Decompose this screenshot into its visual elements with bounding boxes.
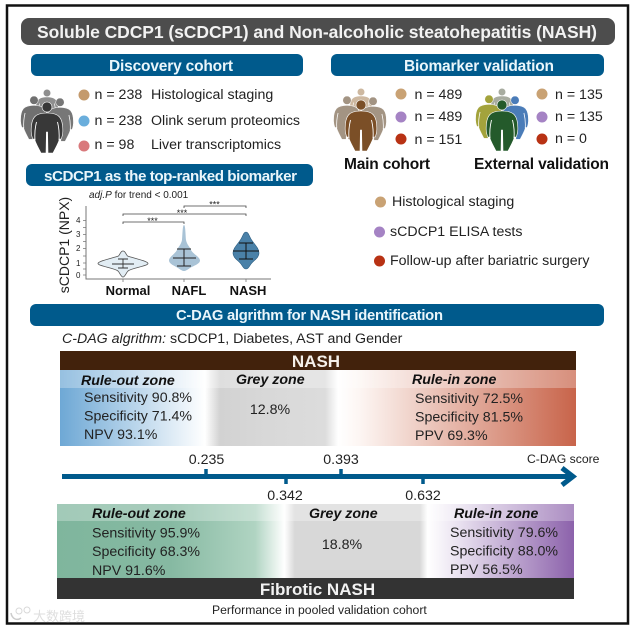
legend: discovery datasets: Liver transcriptomics [151, 137, 281, 153]
watermark [11, 607, 85, 624]
legend: validation datasets: Histological staging [392, 194, 514, 210]
y axis ticks: 2 [76, 244, 81, 253]
legend: validation datasets [374, 194, 590, 269]
heading: biomarker validation [331, 54, 604, 76]
zone: rule-out: NPV 91.6% [92, 563, 166, 579]
heading: fibrotic NASH [57, 578, 574, 599]
legend: external validation: n = 0 [555, 131, 587, 147]
zone: rule-in: PPV 69.3% [415, 428, 488, 444]
legend: discovery datasets: Histological staging [151, 87, 273, 103]
heading: discovery cohort: Discovery cohort [109, 58, 233, 75]
zone: rule-out: NPV 93.1% [84, 427, 158, 443]
cutoffs [189, 452, 441, 504]
zone: rule-in: Sensitivity 72.5% [415, 391, 523, 407]
heading: fibrotic NASH: Fibrotic NASH [260, 580, 375, 599]
heading: top-ranked biomarker [26, 164, 313, 186]
legend: discovery datasets: n = 98 [94, 137, 134, 153]
zone: rule-out [92, 506, 200, 579]
violin: Normal [98, 251, 148, 277]
zone: grey: Grey zone [236, 372, 305, 388]
zone: rule-out: Sensitivity 90.8% [84, 390, 192, 406]
cutoffs: 0.393 [323, 452, 359, 468]
legend: discovery datasets: n = 238 [94, 113, 142, 129]
icon: external validation group [476, 88, 528, 151]
zone: rule-in [412, 372, 523, 444]
heading: discovery cohort [31, 54, 303, 76]
legend: external validation [536, 87, 603, 147]
zone: rule-out: Rule-out zone [92, 506, 186, 522]
zone: rule-in: Sensitivity 79.6% [450, 525, 558, 541]
legend: external validation: n = 135 [555, 109, 603, 125]
legend: main cohort [396, 87, 462, 148]
heading: C-DAG algorithm: C-DAG algrithm for NASH identification [176, 308, 443, 324]
heading: NASH [60, 351, 576, 371]
text: algorithm components: C-DAG algrithm: sCDCP1, Diabetes, AST and Gender [62, 331, 403, 347]
zone background [57, 504, 574, 578]
zone: rule-in: Rule-in zone [454, 506, 538, 522]
title [21, 18, 615, 45]
legend: discovery datasets: Olink serum proteomics [151, 113, 300, 129]
zone: grey: Grey zone [309, 506, 378, 522]
legend: main cohort: n = 489 [414, 109, 462, 125]
heading: biomarker validation: Biomarker validation [404, 58, 554, 75]
cutoffs: 0.342 [267, 488, 303, 504]
icon: main cohort group [334, 88, 386, 151]
zone: rule-out: Specificity 71.4% [84, 408, 192, 424]
violin: NAFL [169, 225, 200, 271]
significance brackets: *** [177, 208, 188, 218]
heading: top-ranked biomarker: sCDCP1 as the top-ranked biomarker [44, 168, 297, 185]
caption: Performance in pooled validation cohort [212, 603, 427, 617]
heading: C-DAG algorithm [30, 304, 604, 326]
y axis ticks [76, 216, 81, 280]
icon: grey patient group [21, 90, 73, 153]
legend: main cohort: n = 151 [414, 132, 462, 148]
legend: external validation: n = 135 [555, 87, 603, 103]
zone: grey: 18.8% [322, 537, 362, 553]
significance brackets: *** [147, 216, 158, 226]
violin chart [56, 197, 271, 298]
x axis labels: NAFL [172, 283, 206, 298]
legend: validation datasets: sCDCP1 ELISA tests [390, 224, 522, 240]
zone: grey [236, 372, 305, 418]
zone: rule-in [450, 506, 558, 578]
legend: discovery datasets [78, 87, 300, 153]
zone: rule-out [81, 373, 192, 443]
zone: rule-in: PPV 56.5% [450, 562, 523, 578]
y axis ticks: 1 [76, 259, 81, 268]
heading: NASH: NASH [292, 352, 340, 371]
zone: rule-out: Sensitivity 95.9% [92, 526, 200, 542]
legend: main cohort: n = 489 [414, 87, 462, 103]
y axis label: sCDCP1 (NPX) [56, 197, 72, 293]
x axis labels [106, 283, 266, 298]
violin: NASH [233, 232, 259, 269]
panel: discovery cohort [21, 54, 303, 153]
zone: rule-in: Specificity 88.0% [450, 544, 558, 560]
x axis labels: Normal [106, 283, 150, 298]
y axis ticks: 4 [76, 216, 81, 225]
panel: top-ranked biomarker [26, 164, 313, 298]
zone: rule-out: Rule-out zone [81, 373, 175, 389]
axis label: C-DAG score [527, 452, 600, 466]
y axis ticks: 0 [76, 271, 81, 280]
x axis labels: NASH [230, 283, 266, 298]
zone: rule-in: Specificity 81.5% [415, 410, 523, 426]
zone: grey: 12.8% [250, 402, 290, 418]
panel: NASH zones [60, 351, 576, 446]
note: trend p value: adj.P for trend < 0.001 [89, 190, 189, 201]
significance brackets: *** [209, 200, 220, 210]
significance brackets [123, 200, 246, 226]
y axis ticks: 3 [76, 230, 81, 239]
arrow: C-DAG score axis [62, 452, 600, 504]
watermark: 大数跨境 [33, 609, 85, 624]
zone background [60, 370, 576, 446]
legend: validation datasets: Follow-up after bariatric surgery [390, 253, 590, 269]
legend: discovery datasets: n = 238 [94, 87, 142, 103]
title: Soluble CDCP1 (sCDCP1) and Non-alcoholic steatohepatitis (NASH) [37, 22, 597, 42]
panel: fibrotic NASH zones [57, 504, 574, 599]
zone: rule-in: Rule-in zone [412, 372, 496, 388]
zone: rule-out: Specificity 68.3% [92, 544, 200, 560]
label: main cohort: Main cohort [344, 156, 430, 173]
cutoffs: 0.632 [405, 488, 441, 504]
panel: biomarker validation [331, 54, 609, 269]
label: external validation: External validation [474, 156, 609, 173]
cutoffs: 0.235 [189, 452, 224, 468]
zone: grey [309, 506, 378, 553]
